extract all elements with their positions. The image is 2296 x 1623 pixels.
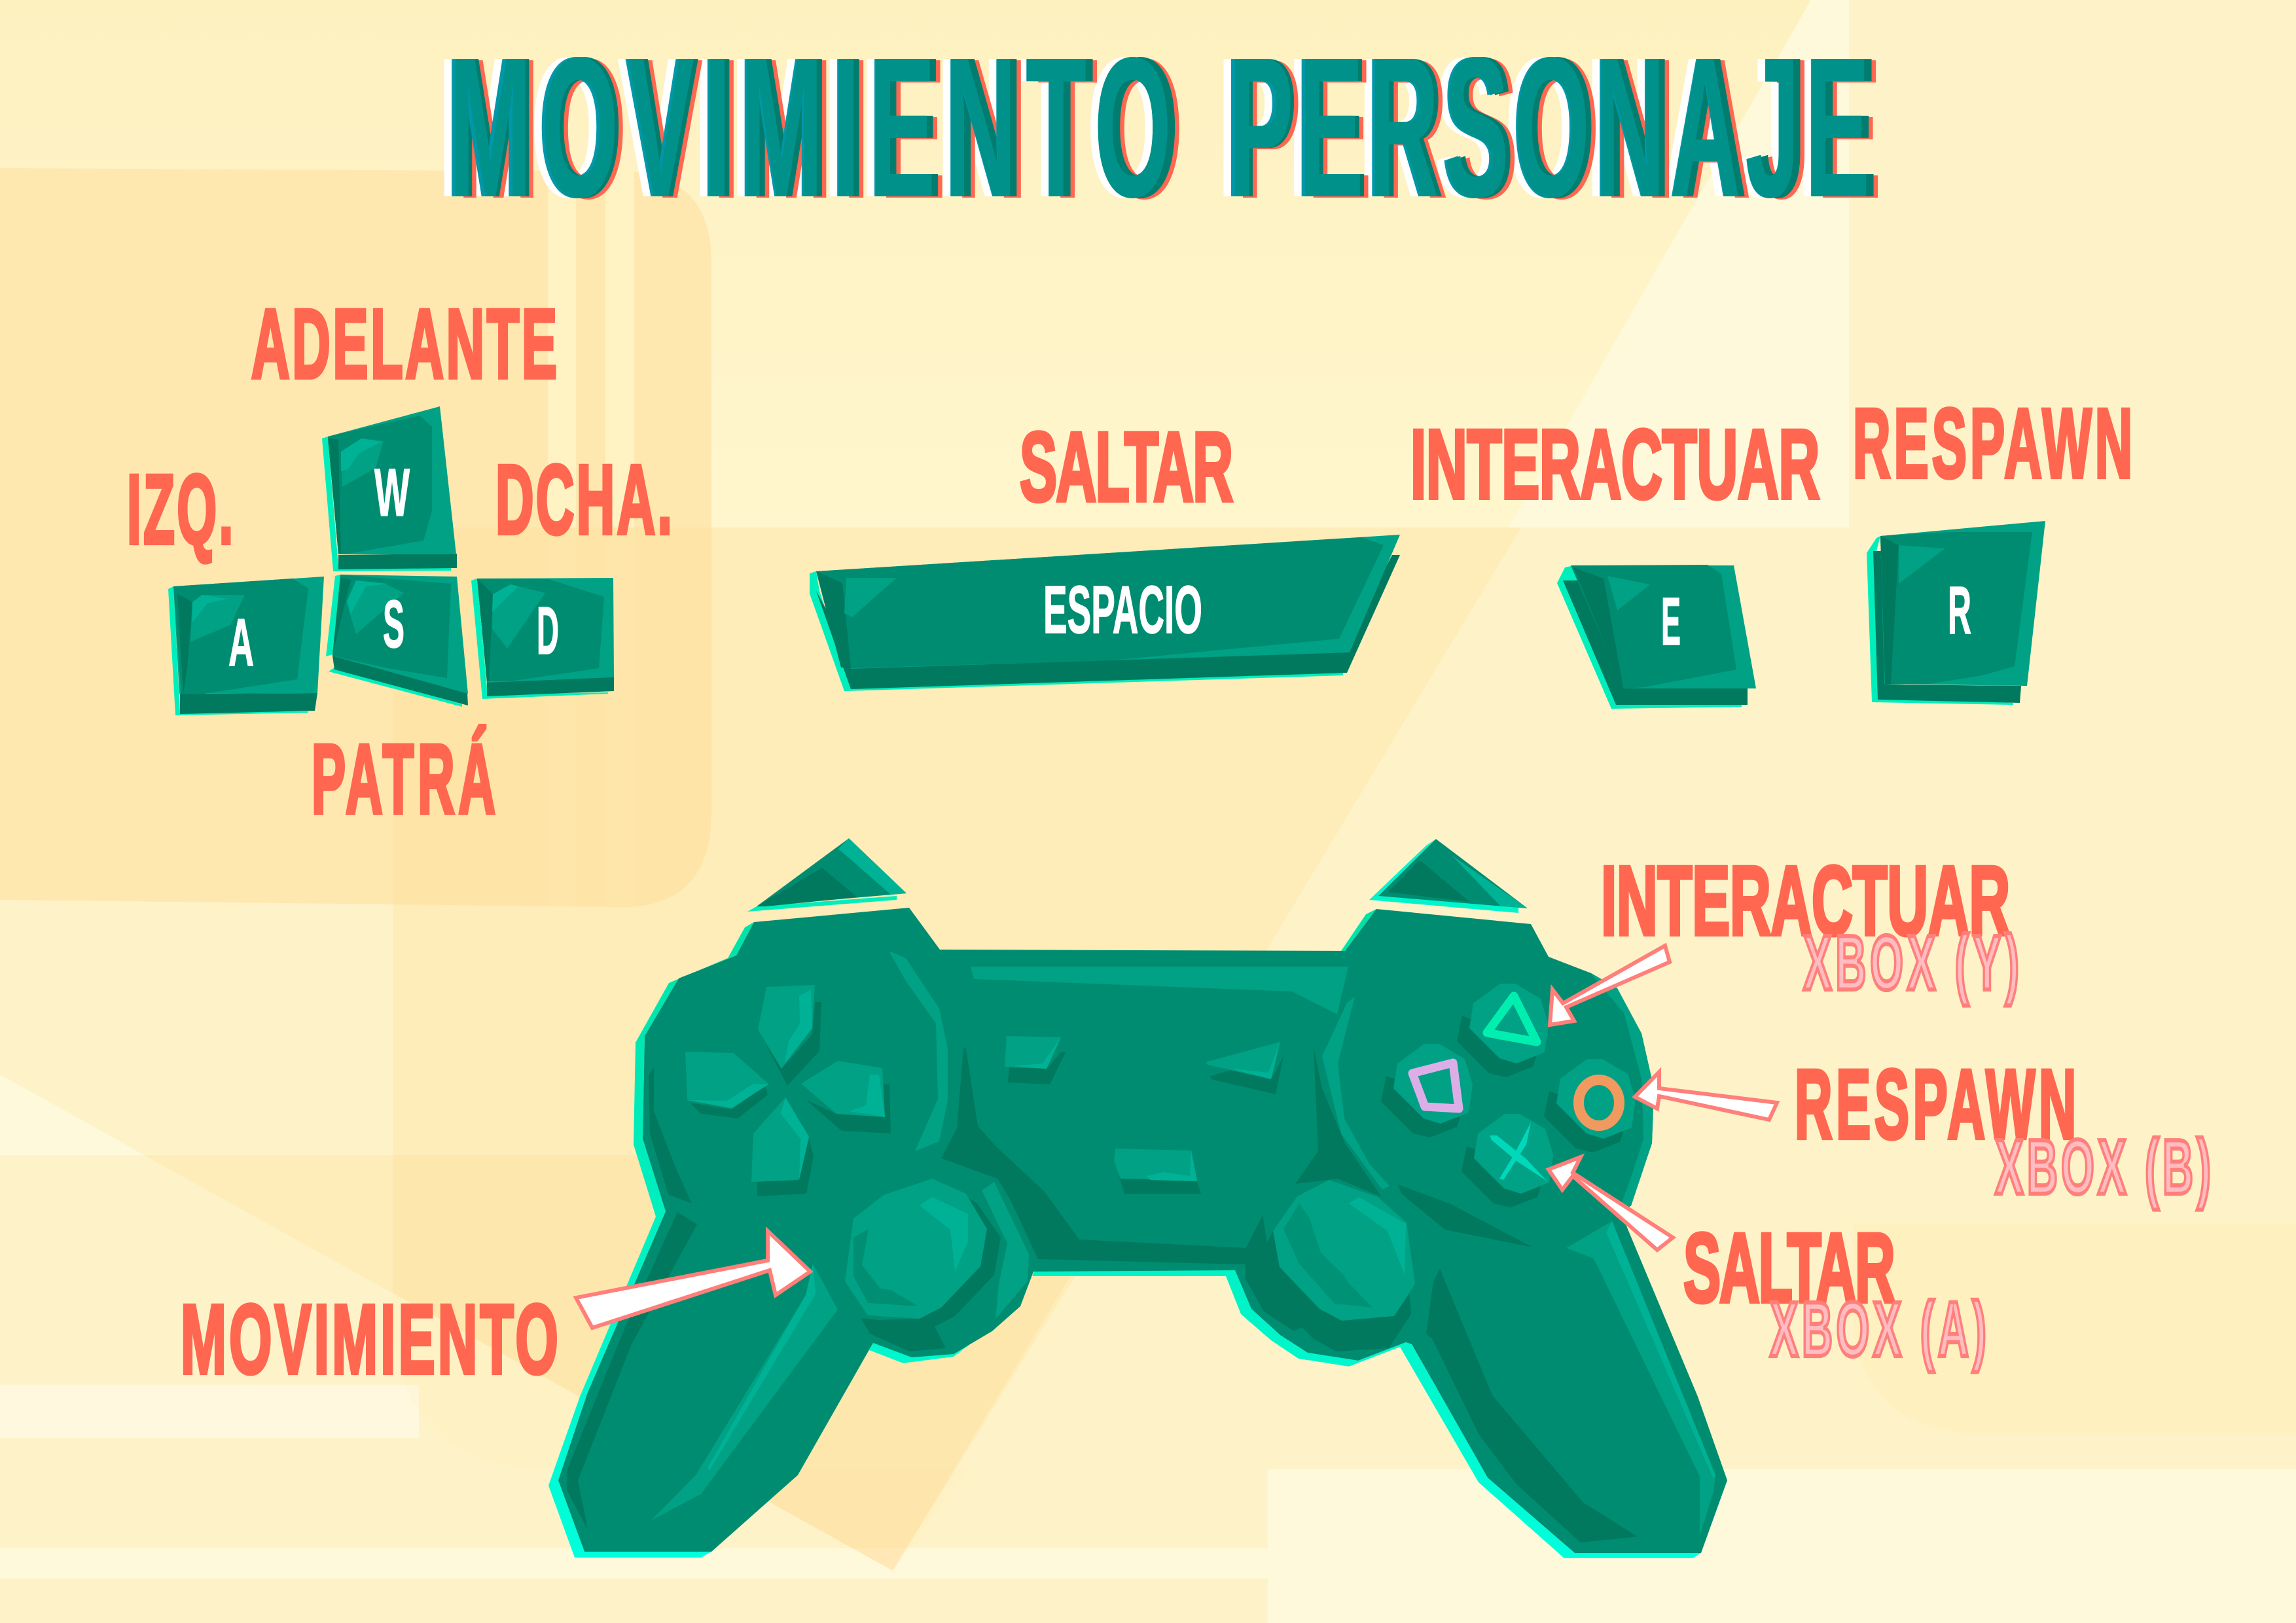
label: interactuar teclado: INTERACTUAR xyxy=(1410,409,1820,519)
label: xbox y: XBOX (Y) xyxy=(1803,919,2019,1007)
left analog stick xyxy=(845,1179,1029,1351)
key E xyxy=(1557,565,1756,709)
title: PERSONAJE xyxy=(1229,16,1870,239)
controller xyxy=(548,838,1727,1558)
key ESPACIO: ESPACIO xyxy=(1043,572,1202,647)
right analog stick xyxy=(1245,1180,1415,1351)
button square xyxy=(1381,1044,1473,1137)
title: MOVIMIENTO xyxy=(457,18,1183,241)
label: patrás: PATRÁ xyxy=(312,725,495,834)
label: saltar mando: SALTAR xyxy=(1683,1213,1895,1323)
label: respawn mando: RESPAWN xyxy=(1795,1050,2076,1159)
key W: W xyxy=(374,455,410,530)
label: movimiento mando: MOVIMIENTO xyxy=(181,1284,558,1394)
label: derecha: DCHA. xyxy=(495,444,672,554)
key ESPACIO xyxy=(810,535,1400,691)
controller body xyxy=(558,908,1727,1553)
title: PERSONAJE xyxy=(1232,16,1877,239)
key D xyxy=(471,578,614,699)
title: PERSONAJE xyxy=(1225,16,1870,239)
controller edge glow xyxy=(548,909,1701,1558)
label: interactuar mando: INTERACTUAR xyxy=(1601,846,2010,955)
key R xyxy=(1867,521,2045,705)
button cross xyxy=(1462,1114,1553,1207)
key E: E xyxy=(1661,584,1681,659)
key W xyxy=(322,406,457,571)
right trigger xyxy=(1369,839,1528,913)
label: adelante: ADELANTE xyxy=(251,289,557,399)
button circle xyxy=(1544,1059,1636,1152)
arrow: movimiento xyxy=(576,1231,810,1328)
button triangle xyxy=(1457,984,1549,1077)
title: PERSONAJE xyxy=(1236,17,1882,240)
arrow: interactuar xyxy=(1550,946,1670,1025)
center buttons xyxy=(1005,1036,1283,1194)
key D: D xyxy=(537,593,559,668)
title: MOVIMIENTO xyxy=(449,17,1172,240)
arrow: saltar xyxy=(1549,1157,1673,1250)
title: PERSONAJE xyxy=(1217,16,1862,239)
label: respawn teclado: RESPAWN xyxy=(1853,389,2132,498)
label: saltar teclado: SALTAR xyxy=(1020,412,1233,522)
key A: A xyxy=(228,605,254,680)
label: izquierda: IZQ. xyxy=(127,455,233,565)
title xyxy=(437,16,1882,241)
title: MOVIMIENTO xyxy=(437,17,1164,240)
d-pad xyxy=(685,985,891,1196)
title: MOVIMIENTO xyxy=(445,17,1172,240)
label: xbox b: XBOX (B) xyxy=(1995,1124,2211,1211)
key R: R xyxy=(1948,573,1971,648)
title: MOVIMIENTO xyxy=(453,17,1179,240)
label: xbox a: XBOX (A) xyxy=(1770,1286,1986,1373)
key S xyxy=(326,575,468,707)
arrow: respawn xyxy=(1635,1072,1777,1120)
key A xyxy=(168,577,324,715)
left trigger xyxy=(747,838,906,912)
controller shading xyxy=(567,951,1715,1543)
key S: S xyxy=(383,586,404,662)
